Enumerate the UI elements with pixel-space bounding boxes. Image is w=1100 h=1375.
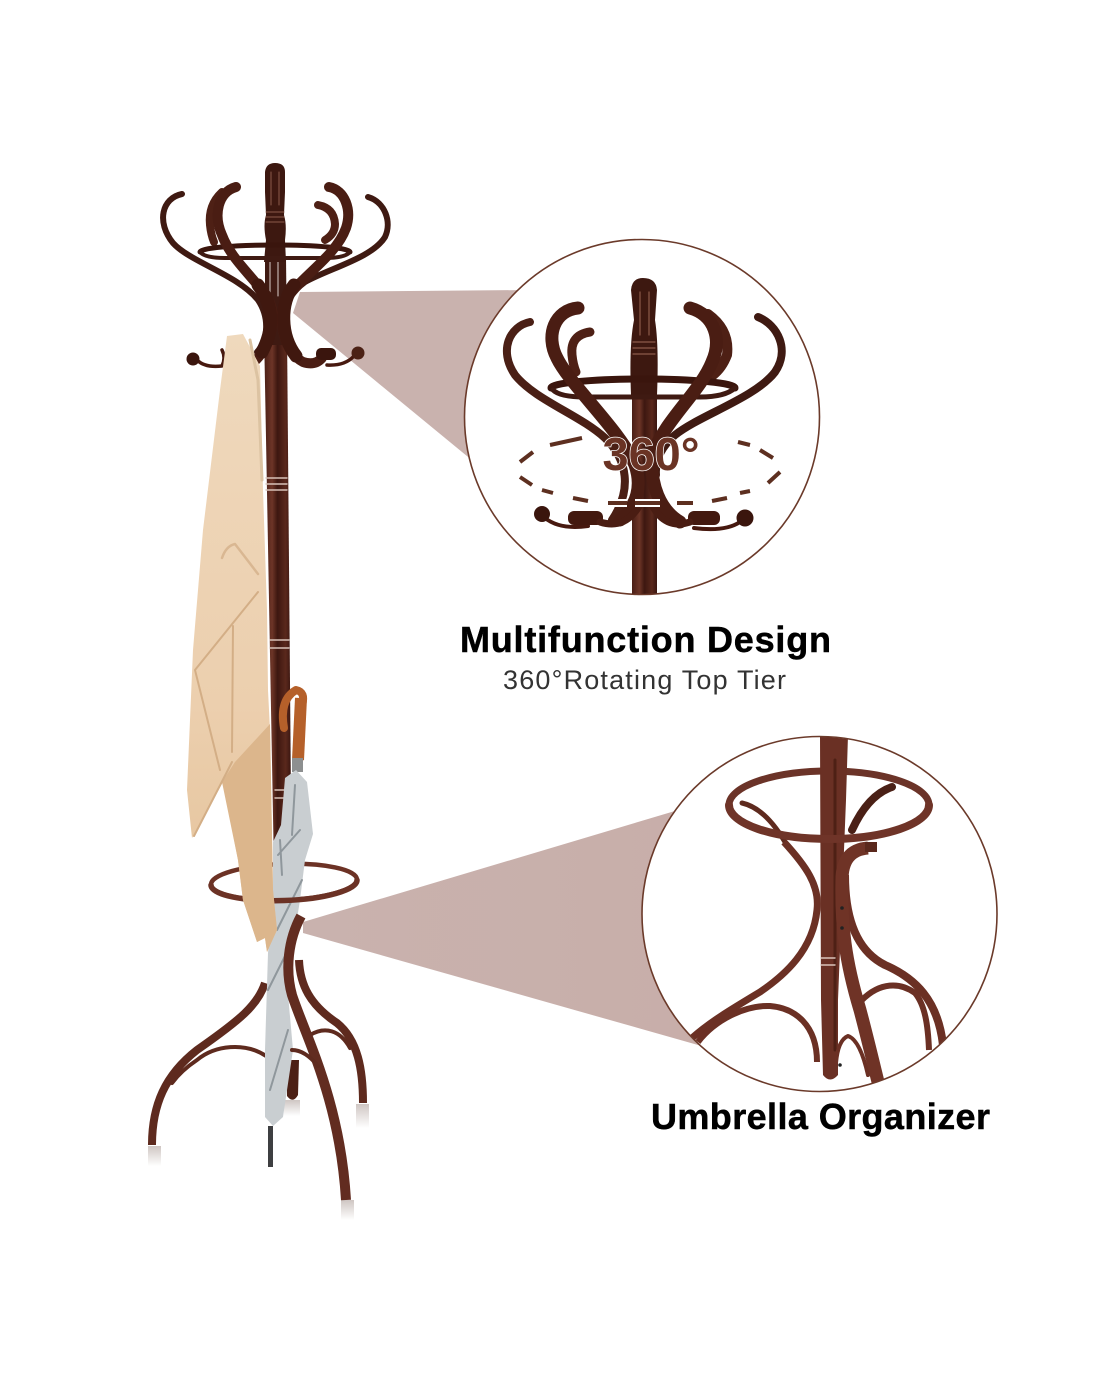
ring back xyxy=(729,771,929,805)
heading: Umbrella Organizer: Umbrella Organizer xyxy=(651,1096,990,1137)
detail pole xyxy=(820,735,848,1080)
detail finial xyxy=(630,278,658,395)
pole turned rings xyxy=(266,478,290,798)
scarf darker lower fold xyxy=(222,724,277,952)
ring front xyxy=(729,805,929,839)
back struts xyxy=(742,803,785,842)
left strut xyxy=(698,1006,817,1062)
panel: 360 rotating top tier detail xyxy=(464,240,820,600)
coat rack product xyxy=(148,163,388,1220)
canopy folds xyxy=(268,785,302,1090)
detail image: rotating top xyxy=(507,278,782,600)
ring xyxy=(551,379,735,388)
outer hooks xyxy=(507,322,625,520)
bracket xyxy=(865,842,877,852)
right inner hook xyxy=(282,187,348,363)
front leg xyxy=(842,848,880,1090)
panel: umbrella organizer detail xyxy=(642,735,997,1092)
base legs xyxy=(152,983,265,1145)
pole lower section xyxy=(287,1060,299,1100)
subheading: rotating top tier: 360°Rotating Top Tier xyxy=(503,665,786,695)
scarf folds xyxy=(222,544,258,574)
right outer hook xyxy=(286,197,388,312)
inner hooks xyxy=(552,308,638,520)
front leg xyxy=(288,916,346,1200)
heading: Multifunction Design: Multifunction Design xyxy=(460,619,831,660)
left inner hook xyxy=(218,187,273,360)
back hooks xyxy=(572,332,590,372)
left leg xyxy=(692,842,817,1038)
small front strut xyxy=(836,1036,868,1075)
finial xyxy=(264,163,286,262)
back hooks xyxy=(210,192,222,242)
right leg xyxy=(845,875,943,1045)
top ring xyxy=(200,245,350,252)
umbrella tip xyxy=(268,1126,273,1167)
scarf xyxy=(187,334,277,952)
detail pole xyxy=(632,395,657,600)
small hooks xyxy=(545,518,588,527)
left outer hook xyxy=(163,194,266,352)
floor reflections xyxy=(148,1100,369,1220)
right strut xyxy=(862,985,929,1050)
small hooks xyxy=(197,350,224,366)
rotation dashed ellipse xyxy=(520,438,780,503)
rack pole xyxy=(264,330,291,870)
umbrella canopy xyxy=(265,770,313,1126)
screws xyxy=(840,906,844,910)
detail image: umbrella ring xyxy=(692,735,943,1090)
stand ring front xyxy=(211,880,357,901)
pole rings xyxy=(821,958,835,965)
umbrella handle xyxy=(283,690,303,728)
callout beam: umbrella ring xyxy=(303,808,705,1047)
360 degree label: 360° xyxy=(602,428,700,480)
stand ring back xyxy=(210,861,358,903)
callout beam: top tier xyxy=(293,290,530,475)
umbrella ferrule xyxy=(292,758,303,772)
